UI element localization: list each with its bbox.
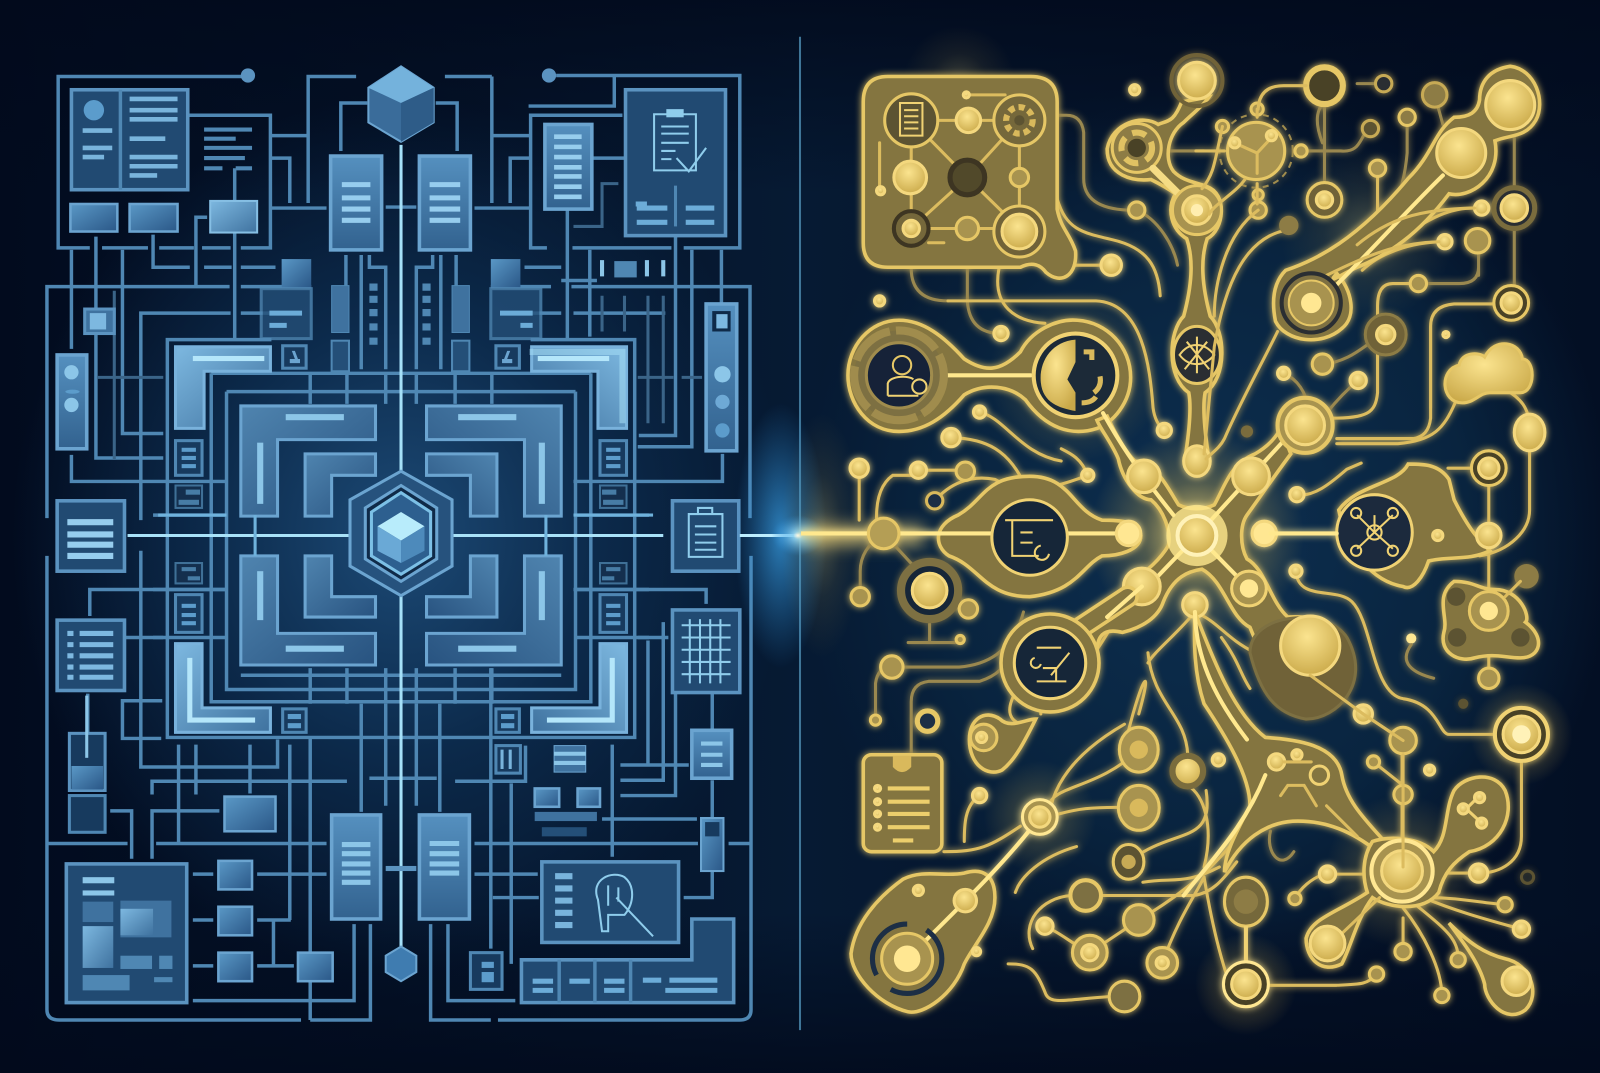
panel: dashboard lower left [66,864,187,1003]
panel: list left mid [57,501,124,571]
textured nodes [1037,727,1294,1012]
connector squares [218,861,333,981]
node: ring lower left cluster [851,562,978,731]
branch: lower centre blob [1184,612,1398,896]
small components lower left [69,696,276,832]
node: central lower right star hub [1306,777,1533,1014]
side module right [706,304,737,451]
side module left [57,309,114,449]
divider with light burst [735,37,923,1030]
node: person check and half face [848,320,1131,431]
panel: clipboard check [626,90,726,236]
small blue boxes [70,201,257,233]
panel: clipboard right mid [672,501,739,571]
panel: rounded network card [863,76,1076,278]
branch: upper centre tube [1107,55,1222,476]
panel: magnifier analysis [542,862,679,942]
panel: structured blue blueprint [47,66,751,1020]
node: lower hub with stem [1223,877,1268,1007]
panel: grid chart [672,610,740,693]
icon: checklist tag [863,755,987,852]
panel: list left lower [57,620,124,691]
thin golden wires [859,84,1530,1001]
branch: central hub and tubes [1071,367,1366,692]
icon: small hexagon [386,947,416,981]
icon: central hexagon cube [350,471,452,596]
text lines beside document [204,130,252,168]
icon: share node with dashed ring [1196,103,1307,454]
server racks lower [332,815,469,919]
small satellite nodes lower right [1289,565,1534,1003]
node: large disc lower hub [1250,616,1356,719]
icon: gear node [994,95,1045,146]
node: cloud [1445,344,1545,451]
panel: organic golden network [801,25,1572,1035]
maze: concentric central frames [153,340,649,737]
icon: document node [885,94,938,147]
panel: tall list upper right [545,124,592,209]
panel: document with avatar [71,90,188,190]
icon: top cube [368,66,434,142]
ambient glows [845,25,1572,1035]
panel: bottom right L [521,919,734,1003]
icons: top node dots [241,68,556,83]
branch: upper right tube [1206,66,1540,459]
node: checklist drawing hub [801,85,1145,597]
server racks upper [331,156,470,250]
top right nodes [1258,67,1535,374]
branch: lower left blob with target [851,800,1057,1012]
node: bright ring right [1495,708,1548,761]
wiring: lower blueprint lines [47,551,751,1020]
panel: network icon blob [1252,451,1506,587]
wiring: upper blueprint lines [47,75,750,520]
node: clover cluster [1443,564,1539,688]
central chips upper [261,259,663,371]
small components lower right [470,730,732,989]
node: notes hub [969,586,1142,772]
crosshair lines through centre [128,145,663,949]
